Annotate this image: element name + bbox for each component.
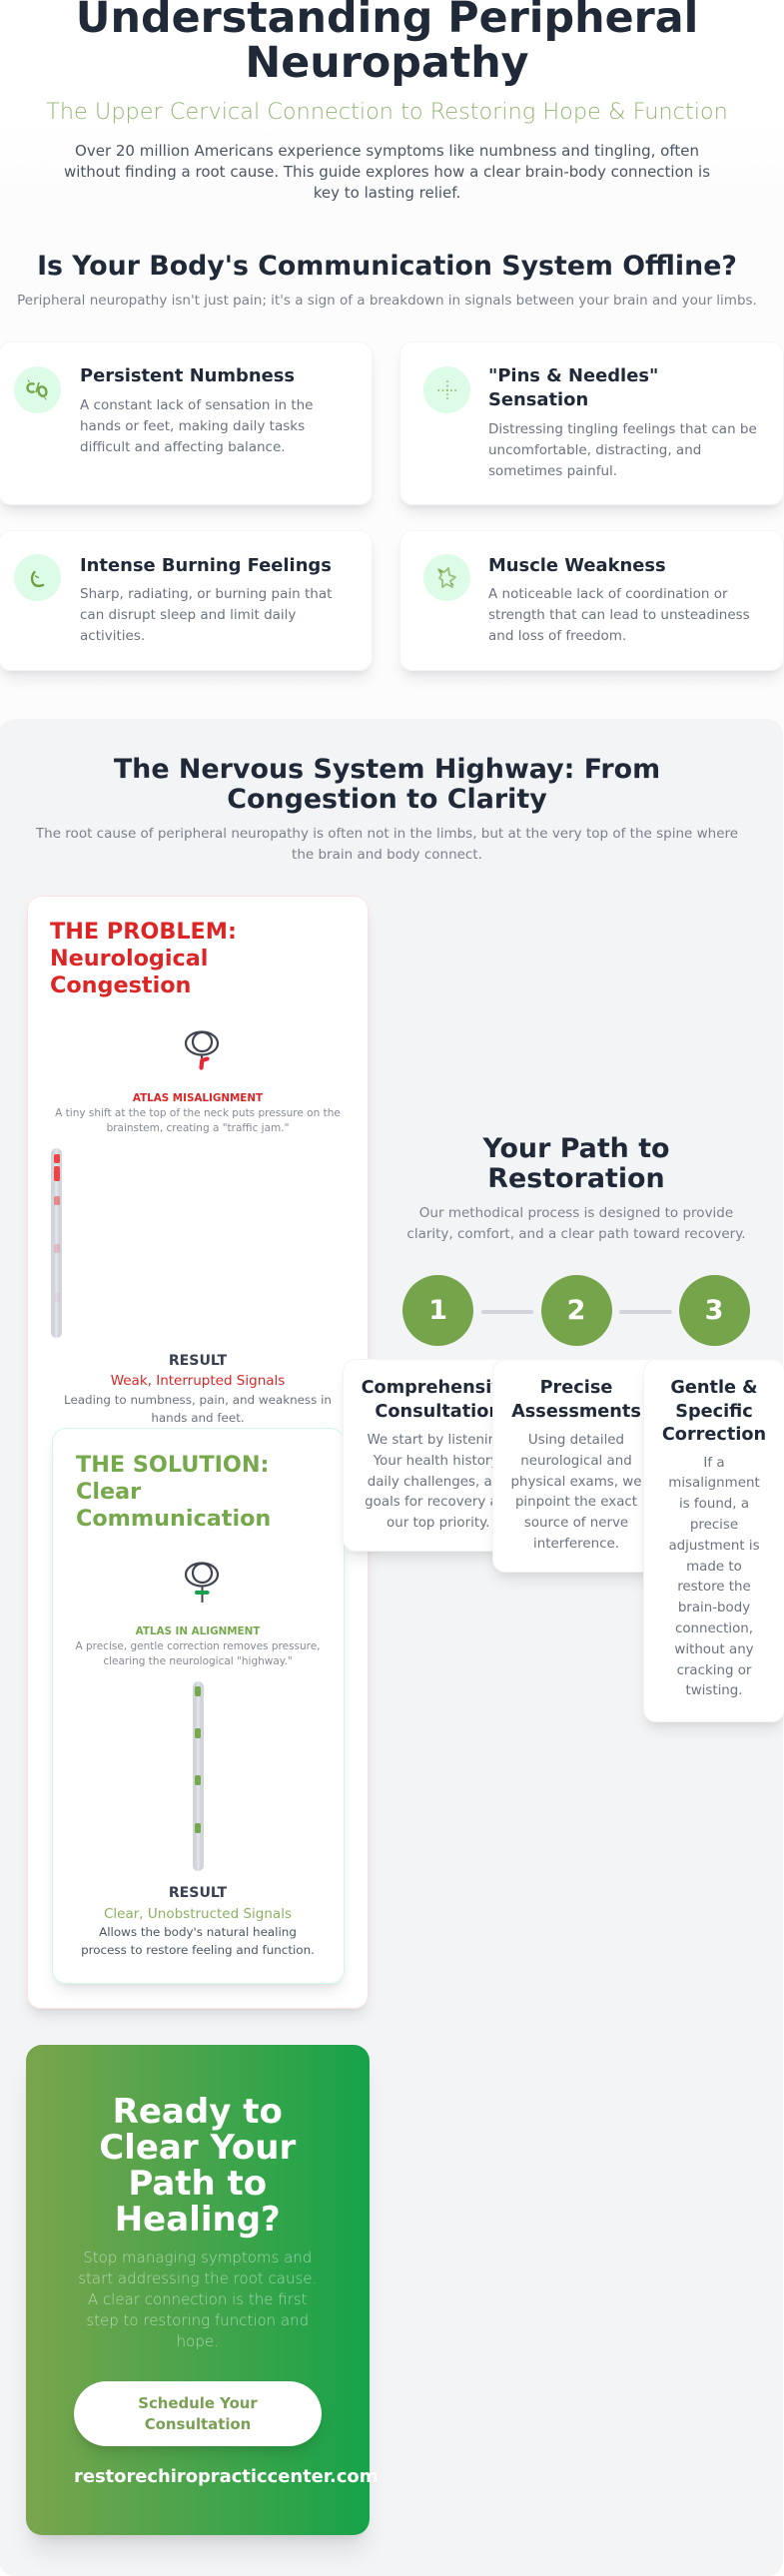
step 3 text: connection, xyxy=(675,1621,753,1636)
step 1 title: Consultation xyxy=(375,1402,501,1422)
solution title: Clear xyxy=(76,1479,141,1505)
cta heading: Path to xyxy=(128,2164,267,2204)
icon: atlas in alignment xyxy=(184,1562,220,1603)
connector 2 to 3 xyxy=(619,1310,672,1314)
card text xyxy=(488,421,757,479)
step 2 title xyxy=(511,1378,641,1422)
cta text: start addressing the root cause. xyxy=(78,2269,317,2287)
atlas label: ATLAS MISALIGNMENT xyxy=(133,1092,263,1104)
step 1 title xyxy=(362,1378,515,1422)
card text xyxy=(488,586,750,644)
card text xyxy=(80,586,332,644)
step 2 text: pinpoint the exact xyxy=(515,1495,637,1510)
cta heading xyxy=(99,2092,296,2240)
step 1 text xyxy=(365,1433,511,1531)
step 2 text: Using detailed xyxy=(528,1433,624,1448)
result text: process to restore feeling and function. xyxy=(81,1943,315,1957)
cta text: hope. xyxy=(177,2332,219,2350)
section heading: The Nervous System Highway: From xyxy=(114,754,660,785)
card title xyxy=(488,365,658,410)
section subtitle: the brain and body connect. xyxy=(292,847,482,863)
card: step 3 xyxy=(643,1359,784,1721)
result signal: Clear, Unobstructed Signals xyxy=(104,1906,292,1922)
step 2 text: physical exams, we xyxy=(510,1475,641,1490)
step 3 text: If a xyxy=(703,1456,725,1471)
intro text: Over 20 million Americans experience symptoms like numbness and tingling, often xyxy=(75,142,699,160)
panel: persistent numbness xyxy=(0,341,373,505)
step 1 text: our top priority. xyxy=(387,1516,489,1531)
intro text: without finding a root cause. This guide explores how a clear brain-body connection is xyxy=(64,163,710,181)
atlas description: clearing the neurological "highway." xyxy=(103,1655,293,1667)
card text xyxy=(80,397,313,455)
section subtitle: The root cause of peripheral neuropathy is often not in the limbs, but at the very top of the spine where xyxy=(36,826,738,842)
step 2 text xyxy=(510,1433,641,1552)
step number 2 xyxy=(541,1274,611,1346)
result text: Allows the body's natural healing xyxy=(99,1925,297,1939)
result text xyxy=(64,1393,332,1425)
step 2 text: neurological and xyxy=(520,1454,632,1469)
panel: nervous system highway section xyxy=(0,719,783,2576)
section subtitle: Peripheral neuropathy isn't just pain; it's a sign of a breakdown in signals between your brain and your limbs. xyxy=(17,293,757,309)
spine: interrupted signal xyxy=(51,1148,62,1338)
step 1 title: Comprehensive xyxy=(362,1378,515,1398)
heading: path to restoration: Your Path to xyxy=(482,1133,670,1164)
atlas description xyxy=(55,1107,341,1134)
intro text xyxy=(64,142,710,202)
heading: path to restoration: Restoration xyxy=(487,1163,665,1194)
card: step 1 xyxy=(343,1359,534,1552)
section heading: Congestion to Clarity xyxy=(227,784,547,815)
step 2 text: source of nerve xyxy=(524,1516,628,1531)
step 3 title: Gentle & xyxy=(670,1378,758,1398)
panel: call to action xyxy=(26,2045,370,2535)
step 3 text xyxy=(668,1456,760,1698)
problem title xyxy=(50,919,237,998)
panel: pins and needles xyxy=(399,341,784,505)
step 3 text: brain-body xyxy=(678,1601,750,1615)
card text: sometimes painful. xyxy=(488,463,617,479)
solution title xyxy=(76,1452,271,1532)
step number 2: 2 xyxy=(567,1294,585,1326)
step 3 text: made to xyxy=(686,1560,742,1575)
heading: communication system: Is Your Body's Communication System Offline? xyxy=(37,251,737,282)
solution title: Communication xyxy=(76,1506,271,1532)
card text: Distressing tingling feelings that can be xyxy=(488,421,757,437)
cta heading: Clear Your xyxy=(99,2128,296,2168)
atlas description: A tiny shift at the top of the neck puts pressure on the xyxy=(55,1107,341,1119)
panel: burning feelings xyxy=(0,530,373,671)
card text: uncomfortable, distracting, and xyxy=(488,442,701,458)
result text: Leading to numbness, pain, and weakness in xyxy=(64,1393,332,1407)
step 3 text: without any xyxy=(674,1642,754,1657)
problem title: Congestion xyxy=(50,972,191,998)
card title: Intense Burning Feelings xyxy=(80,555,332,575)
panel: the problem xyxy=(26,896,369,2009)
path subtitle: Our methodical process is designed to provide xyxy=(419,1205,733,1221)
result heading: RESULT xyxy=(169,1885,227,1901)
path subtitle xyxy=(406,1205,746,1242)
result heading: RESULT xyxy=(169,1353,227,1369)
card text: hands or feet, making daily tasks xyxy=(80,418,305,434)
icon: numbness links xyxy=(14,365,61,413)
cta heading: Ready to xyxy=(113,2092,283,2132)
cta text: step to restoring function and xyxy=(86,2311,309,2329)
website address: restorechiropracticcenter.com xyxy=(74,2466,378,2487)
spine: clear signal xyxy=(193,1681,204,1871)
step 3 text: cracking or xyxy=(677,1663,751,1678)
card title: Sensation xyxy=(488,389,588,410)
cta text xyxy=(78,2249,317,2350)
atlas description xyxy=(75,1640,321,1667)
path subtitle: clarity, comfort, and a clear path toward recovery. xyxy=(406,1226,746,1242)
step 3 text: adjustment is xyxy=(668,1539,760,1554)
subtitle: The Upper Cervical Connection to Restoring Hope & Function xyxy=(46,99,728,125)
step 3 text: twisting. xyxy=(685,1683,743,1698)
problem title: Neurological xyxy=(50,946,208,971)
atlas description: A precise, gentle correction removes pressure, xyxy=(75,1640,321,1652)
step number 1 xyxy=(402,1274,473,1346)
cta text: A clear connection is the first xyxy=(88,2290,308,2308)
heading: path to restoration xyxy=(482,1133,670,1194)
button: schedule consultation xyxy=(74,2381,322,2446)
connector 1 to 2 xyxy=(481,1310,533,1314)
step 2 text: interference. xyxy=(533,1537,619,1552)
card title: Persistent Numbness xyxy=(80,365,295,386)
button label: Schedule Your xyxy=(138,2394,258,2412)
card text: A noticeable lack of coordination or xyxy=(488,586,728,602)
card text: difficult and affecting balance. xyxy=(80,439,286,455)
cta heading: Healing? xyxy=(115,2200,281,2240)
card text: activities. xyxy=(80,628,145,644)
icon: atlas misalignment xyxy=(184,1030,220,1070)
problem title: THE PROBLEM: xyxy=(50,919,237,945)
atlas label: ATLAS IN ALIGNMENT xyxy=(136,1625,260,1637)
icon: burning curve xyxy=(14,554,61,601)
step 3 text: misalignment xyxy=(668,1476,760,1491)
result text xyxy=(81,1925,315,1957)
section heading xyxy=(114,754,660,815)
step 1 text: Your health history, xyxy=(374,1454,503,1469)
card: step 2 xyxy=(492,1359,660,1573)
step 3 title xyxy=(662,1378,766,1445)
solution title: THE SOLUTION: xyxy=(76,1452,269,1478)
step 2 title: Assessments xyxy=(511,1402,641,1422)
step 1 text: We start by listening. xyxy=(367,1433,509,1448)
icon: star outline xyxy=(423,554,469,601)
card text: can disrupt sleep and limit daily xyxy=(80,607,296,623)
step 3 title: Correction xyxy=(662,1425,766,1445)
step number 1: 1 xyxy=(428,1294,447,1326)
step number 3: 3 xyxy=(705,1294,723,1326)
atlas description: brainstem, creating a "traffic jam." xyxy=(107,1122,289,1134)
step 3 title: Specific xyxy=(675,1402,753,1422)
step 3 text: is found, a xyxy=(679,1497,749,1512)
card text: A constant lack of sensation in the xyxy=(80,397,313,413)
card text: Sharp, radiating, or burning pain that xyxy=(80,586,332,602)
title: Neuropathy xyxy=(245,38,529,88)
step number 3 xyxy=(679,1274,749,1346)
card text: strength that can lead to unsteadiness xyxy=(488,607,750,623)
section subtitle xyxy=(36,826,738,863)
panel: the solution xyxy=(52,1428,344,1984)
step 2 title: Precise xyxy=(540,1378,612,1398)
button label xyxy=(138,2394,258,2433)
card title: Muscle Weakness xyxy=(488,555,666,575)
panel: muscle weakness xyxy=(399,530,784,671)
card title: "Pins & Needles" xyxy=(488,365,658,386)
step 3 text: precise xyxy=(690,1518,738,1533)
result signal: Weak, Interrupted Signals xyxy=(111,1373,285,1389)
cta text: Stop managing symptoms and xyxy=(83,2249,312,2266)
icon: dotted cross xyxy=(423,365,469,413)
step 3 text: restore the xyxy=(677,1580,751,1595)
step 1 text: goals for recovery are xyxy=(365,1495,511,1510)
card text: and loss of freedom. xyxy=(488,628,626,644)
button label: Consultation xyxy=(145,2415,251,2433)
title xyxy=(76,0,698,88)
result text: hands and feet. xyxy=(151,1411,245,1425)
intro text: key to lasting relief. xyxy=(314,184,460,202)
step 1 text: daily challenges, and xyxy=(368,1475,509,1490)
